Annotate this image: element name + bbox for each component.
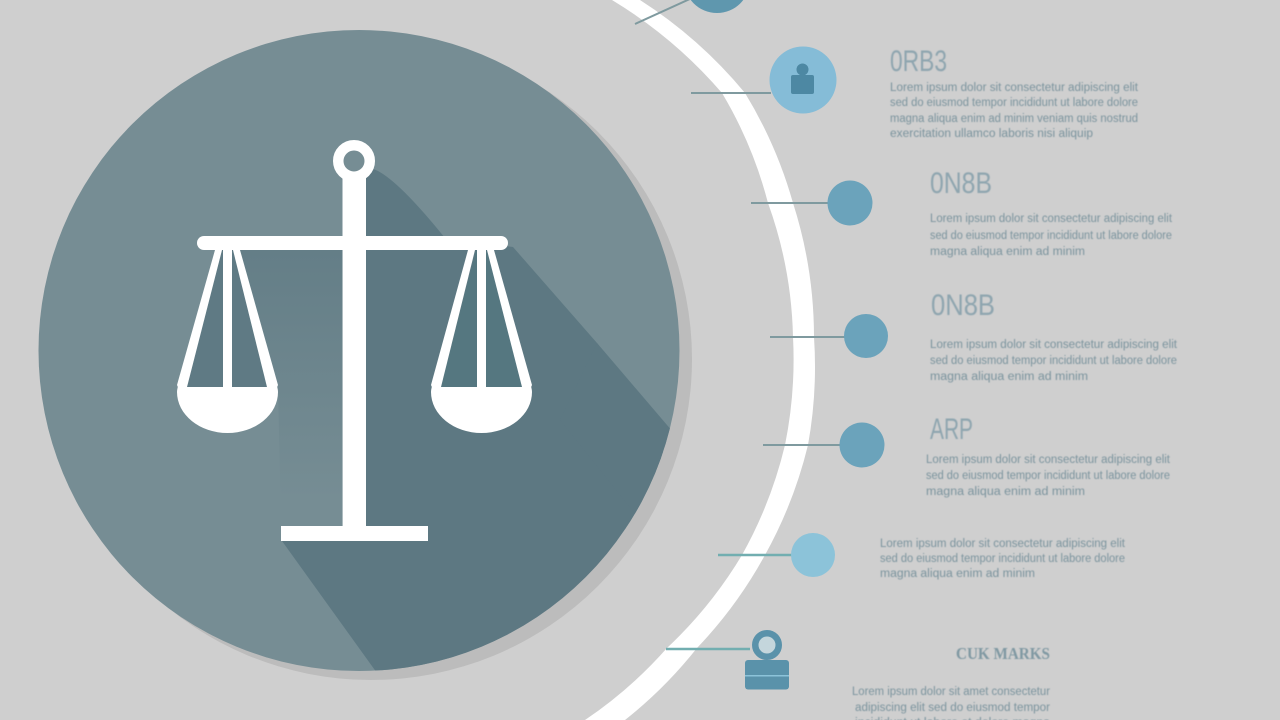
disc offset shadow: [50, 38, 692, 680]
scale pole: [342, 176, 366, 530]
block 3 text: Lorem ipsum dolor sit consectetur adipiscing elit: [930, 339, 1178, 351]
long shadow of scales: [240, 169, 670, 670]
node: lock icon: [666, 633, 789, 690]
node: circle 3: [770, 314, 888, 358]
block 6 text: CUK MARKS: [956, 644, 1050, 663]
icon: scales of justice: [177, 145, 532, 541]
block 3 text: 0N8B: [931, 289, 995, 322]
block 6 text: [852, 644, 1051, 720]
block 2 text: [930, 167, 1173, 258]
block 4 text: sed do eiusmod tempor incididunt ut labore dolore: [926, 470, 1170, 482]
scale top ring: [338, 145, 370, 177]
block 5 text: Lorem ipsum dolor sit consectetur adipiscing elit: [880, 538, 1126, 550]
block 1 text: Lorem ipsum dolor sit consectetur adipiscing elit: [890, 82, 1139, 94]
block 2 text: 0N8B: [930, 167, 992, 200]
node: person icon circle: [691, 46, 836, 114]
right pan: [431, 250, 532, 433]
block 4 text: [926, 413, 1171, 498]
block 1 text: sed do eiusmod tempor incididunt ut labore dolore: [890, 97, 1138, 109]
block 1 text: exercitation ullamco laboris nisi aliquip: [890, 128, 1093, 140]
node: circle 2: [751, 180, 872, 226]
disc base: [38, 30, 680, 671]
block 1 text: 0RB3: [890, 45, 947, 78]
node: circle 5: [718, 533, 835, 577]
left pan: [177, 250, 278, 433]
white curved ring: [585, 0, 815, 720]
block 5 text: sed do eiusmod tempor incididunt ut labore dolore: [880, 553, 1125, 565]
block 1 text: magna aliqua enim ad minim veniam quis nostrud: [890, 113, 1138, 125]
block 3 text: sed do eiusmod tempor incididunt ut labore dolore: [930, 355, 1177, 367]
node: top partial circle: [635, 0, 750, 24]
node: circle 4: [763, 422, 884, 468]
block 2 text: Lorem ipsum dolor sit consectetur adipiscing elit: [930, 213, 1173, 225]
block 3 text: magna aliqua enim ad minim: [930, 371, 1088, 383]
block 2 text: magna aliqua enim ad minim: [930, 246, 1085, 258]
block 6 text: Lorem ipsum dolor sit amet consectetur: [852, 686, 1050, 698]
scale base: [281, 526, 428, 541]
block 6 text: adipiscing elit sed do eiusmod tempor: [855, 702, 1050, 714]
block 5 text: magna aliqua enim ad minim: [880, 568, 1035, 580]
block 3 text: [930, 289, 1178, 383]
block 4 text: ARP: [930, 413, 973, 446]
block 2 text: sed do eiusmod tempor incididunt ut labore dolore: [930, 230, 1172, 242]
block 5 text: [880, 538, 1126, 580]
block 4 text: magna aliqua enim ad minim: [926, 486, 1085, 498]
scale beam: [197, 236, 508, 250]
panel: scales of justice disc: [38, 30, 692, 700]
block 4 text: Lorem ipsum dolor sit consectetur adipiscing elit: [926, 454, 1171, 466]
block 1 text: [890, 45, 1139, 140]
